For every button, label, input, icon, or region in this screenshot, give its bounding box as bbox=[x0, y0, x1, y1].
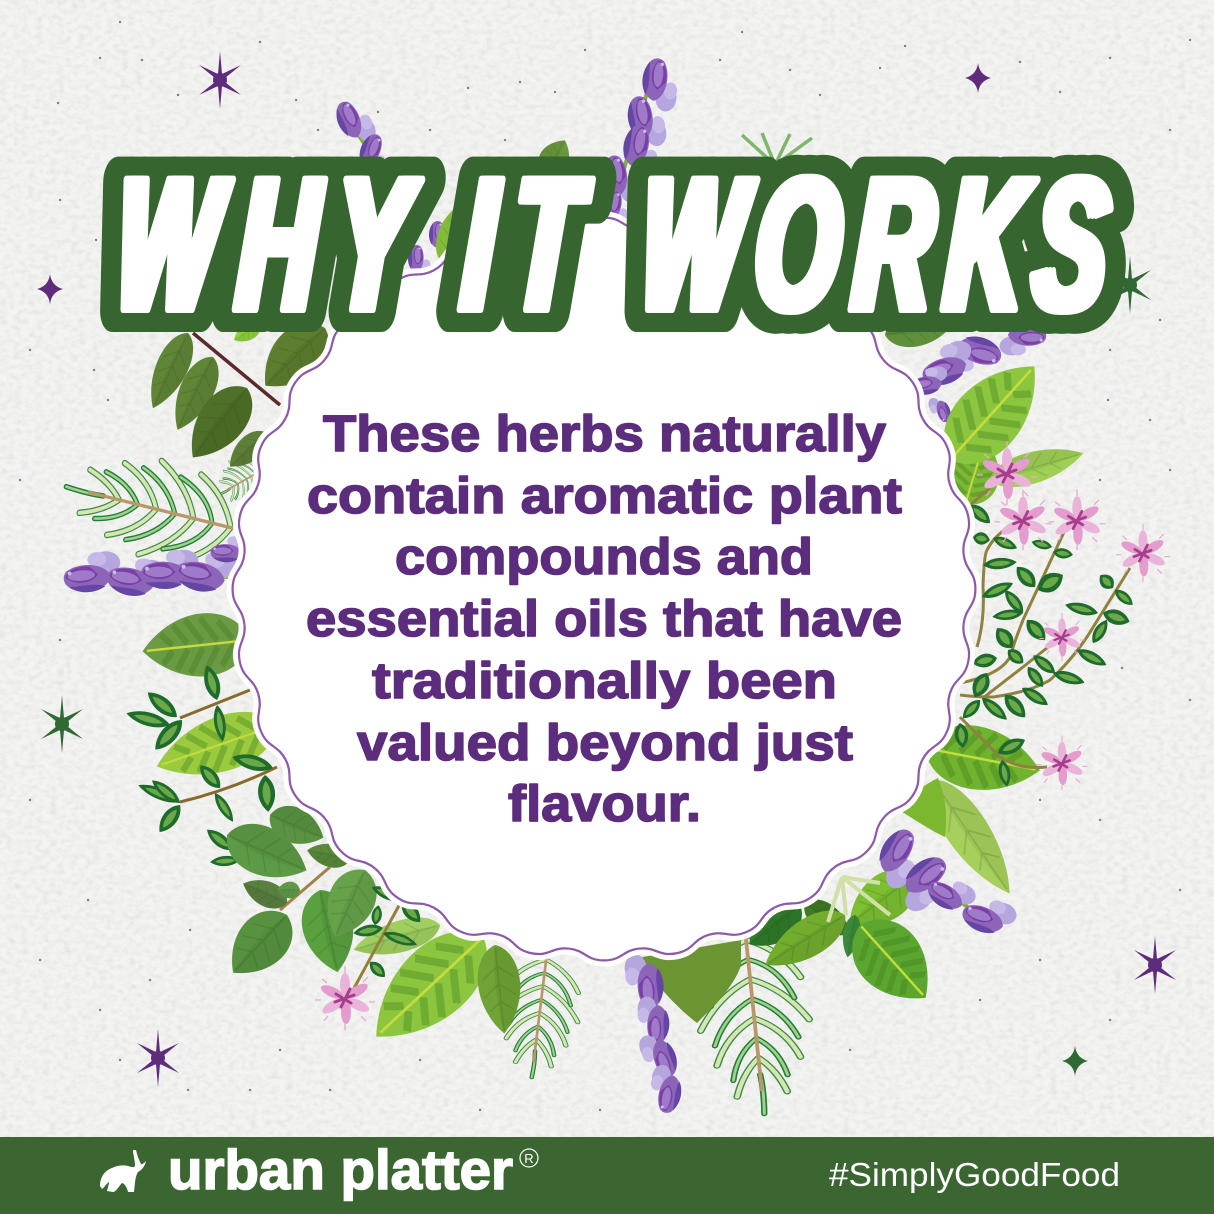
title: WHY bbox=[111, 140, 422, 349]
body text: essential oils that have bbox=[306, 590, 902, 647]
body text: compounds and bbox=[395, 528, 813, 585]
lower left oregano bbox=[215, 799, 386, 990]
icon: elephant logo bbox=[100, 1150, 146, 1192]
left sage and bright leaves bbox=[139, 609, 444, 965]
body text: flavour. bbox=[508, 775, 701, 832]
left thyme sprigs bbox=[125, 663, 277, 867]
lavender sprigs bbox=[62, 57, 1046, 1115]
title bbox=[98, 140, 1126, 349]
bottom leaves bbox=[352, 857, 950, 1063]
right leaves bbox=[431, 133, 1088, 905]
bottom thyme with pink flower bbox=[315, 882, 425, 1030]
body text: contain aromatic plant bbox=[307, 467, 902, 524]
body text: traditionally been bbox=[372, 652, 837, 709]
registered mark bbox=[520, 1149, 538, 1167]
rosemary sprigs bbox=[54, 133, 819, 1119]
body text bbox=[306, 405, 902, 832]
registered mark: R bbox=[524, 1151, 534, 1166]
title: WORKS bbox=[636, 140, 1113, 349]
scalloped circle panel bbox=[233, 218, 975, 960]
right thyme with pink flowers bbox=[953, 441, 1170, 790]
body text: valued beyond just bbox=[357, 714, 853, 771]
upper left oregano bbox=[139, 310, 343, 476]
brand name: urban platter bbox=[168, 1138, 513, 1201]
body text: These herbs naturally bbox=[323, 405, 887, 462]
title: IT bbox=[458, 140, 593, 349]
footer bar bbox=[0, 1137, 1214, 1214]
hashtag: #SimplyGoodFood bbox=[829, 1156, 1120, 1193]
